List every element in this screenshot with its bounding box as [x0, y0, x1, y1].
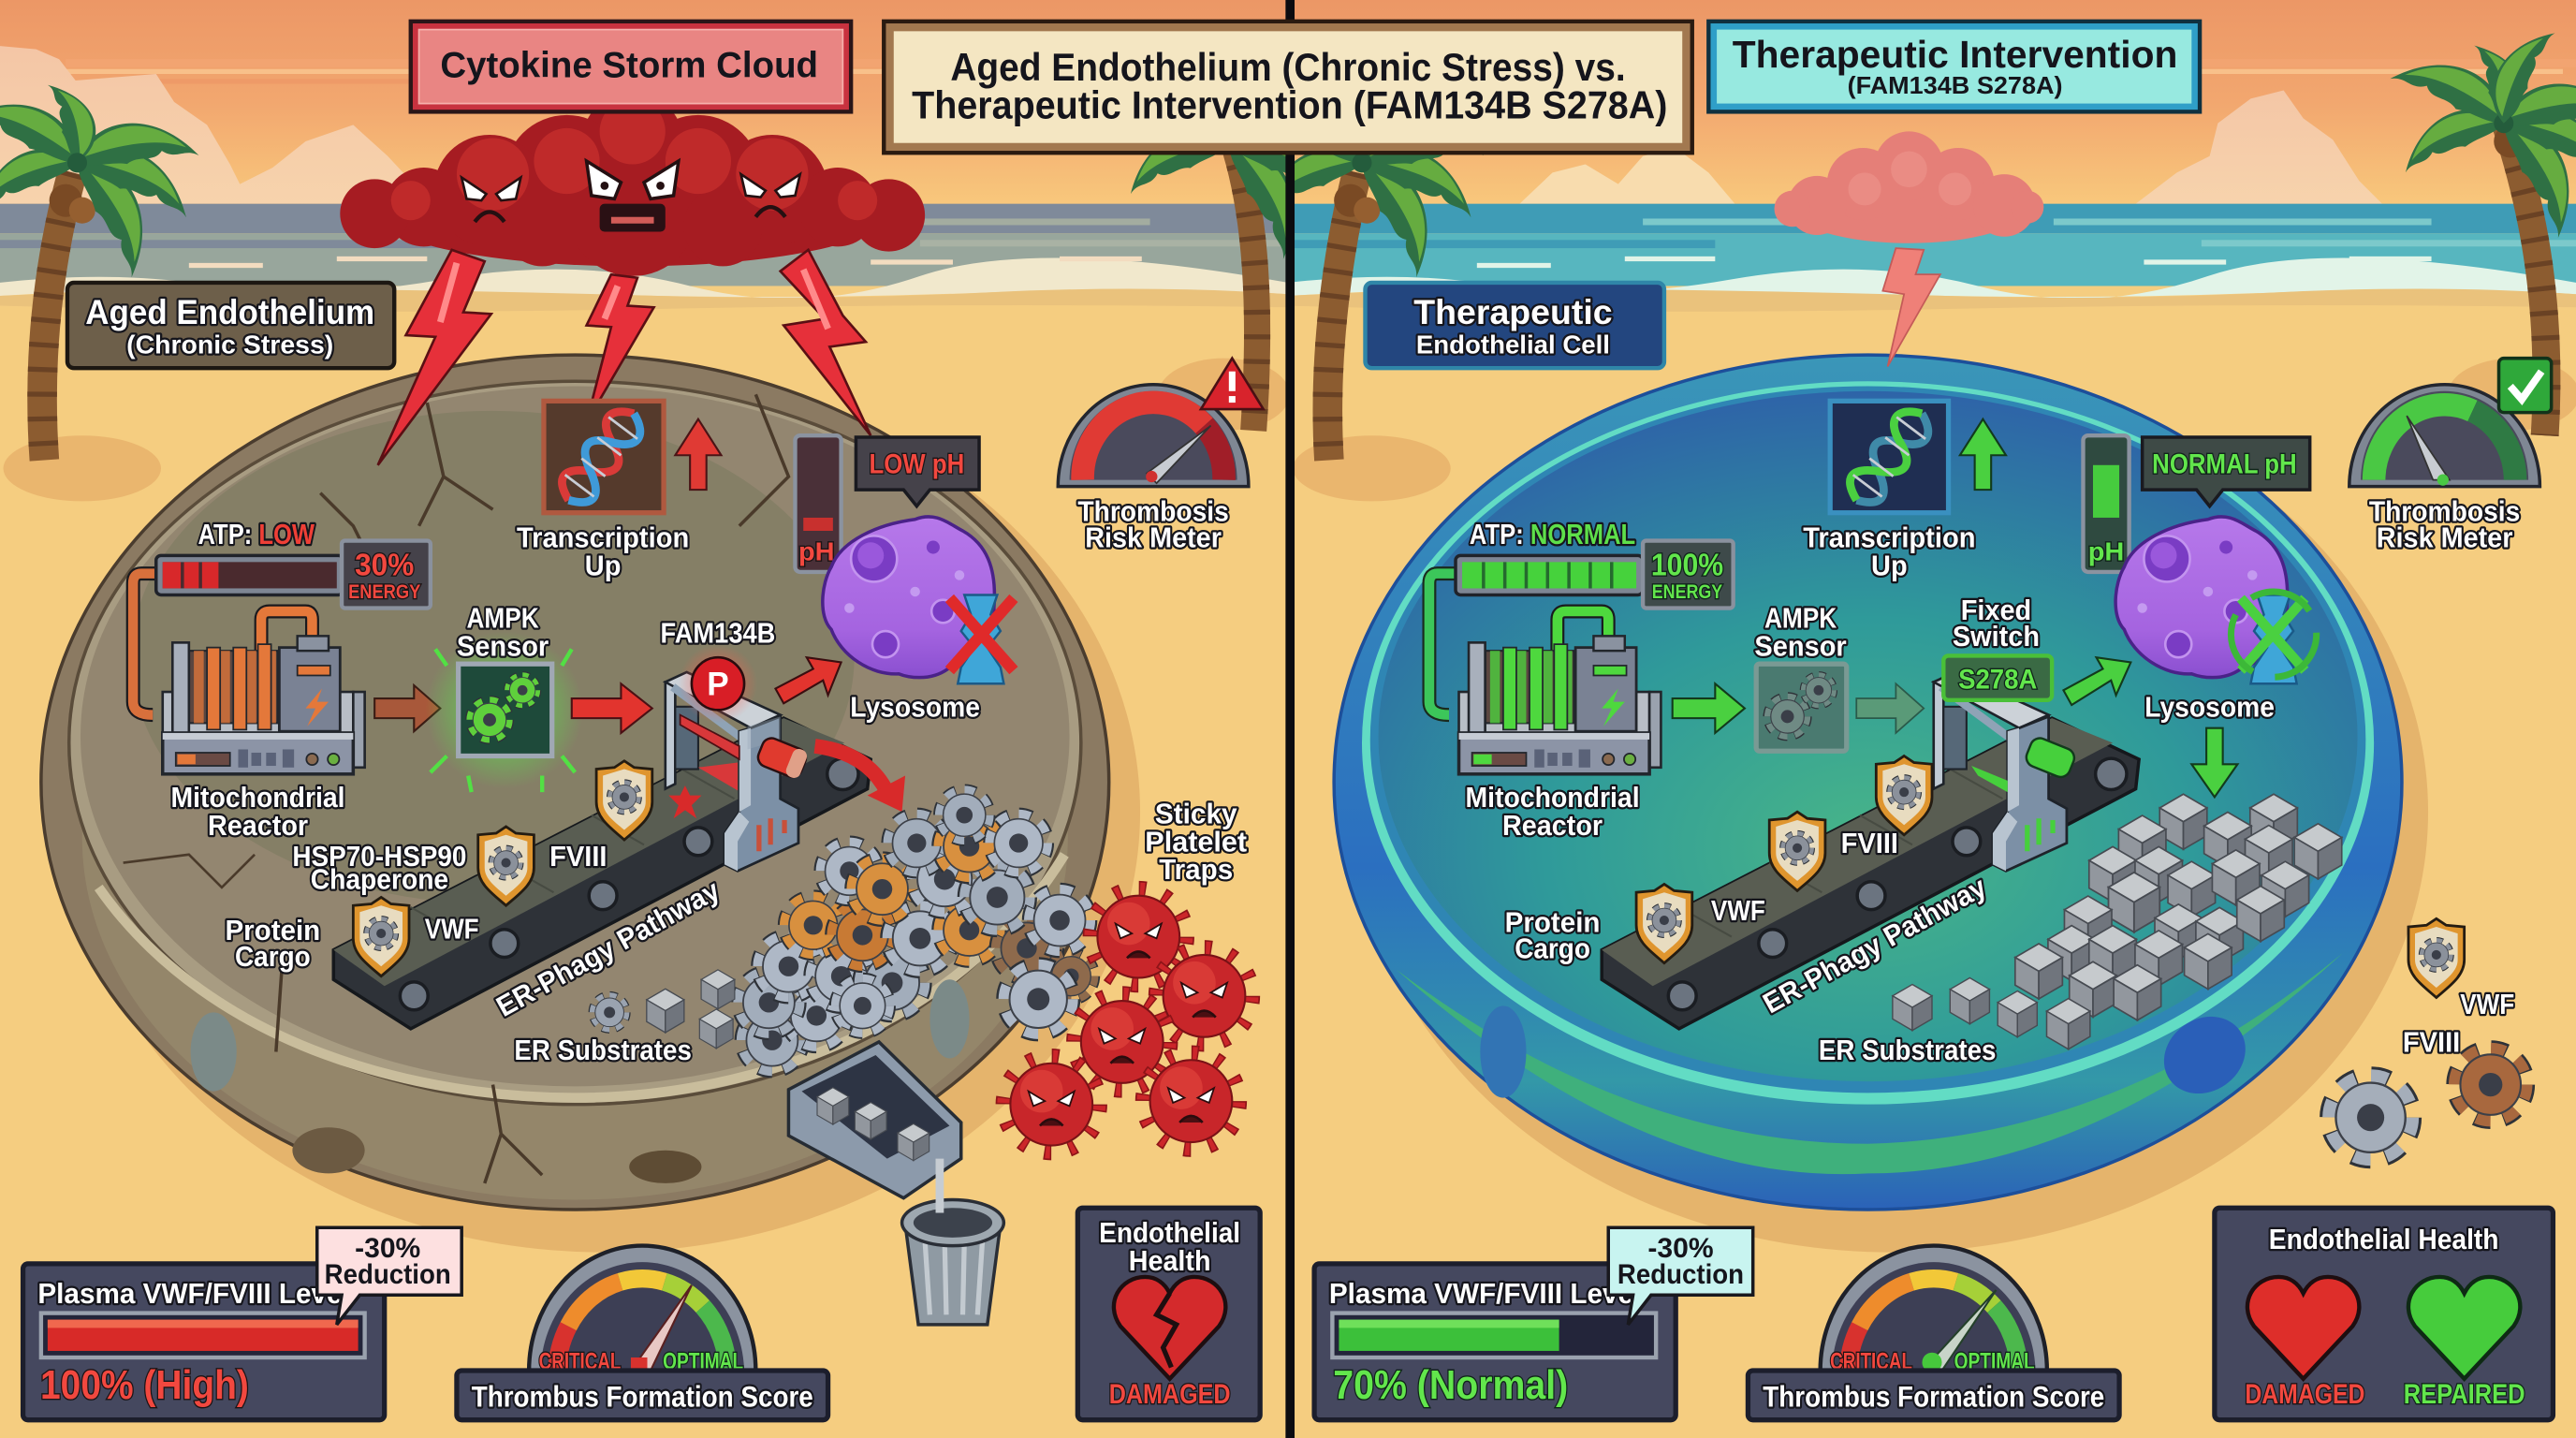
arrow: lysosome down: [2191, 728, 2237, 797]
gate right: [1934, 672, 2077, 871]
title: cytokine storm cloud: Cytokine Storm Cloud: [440, 46, 818, 86]
text: transcription up right: Transcription: [1803, 521, 1976, 554]
title: cytokine storm cloud: [411, 22, 851, 111]
panel: endothelial health right: Endothelial Health: [2269, 1223, 2499, 1255]
main title: Aged Endothelium (Chronic Stress) vs.: [950, 46, 1626, 89]
panel: plasma level left: 100% (High): [40, 1362, 249, 1408]
energy meter right: ENERGY: [1652, 581, 1722, 603]
therapeutic cell dish: [1334, 355, 2428, 1253]
label: aged endothelium: (Chronic Stress): [126, 330, 333, 359]
gauge: thrombus score left: Thrombus Formation Score: [472, 1380, 813, 1414]
panel: endothelial health right: REPAIRED: [2404, 1379, 2525, 1410]
panel: plasma level left: [23, 1264, 385, 1420]
text: thrombosis risk left: [1077, 494, 1229, 554]
text: transcription up left: Up: [585, 549, 621, 581]
panel: aged endothelium background: [0, 0, 1286, 502]
label: therapeutic endothelial cell: [1365, 283, 1664, 368]
energy meter left: ENERGY: [348, 581, 420, 603]
text: sticky platelet traps: Sticky: [1155, 797, 1237, 829]
label: fixed switch: S278A: [1958, 665, 2037, 696]
label: therapeutic endothelial cell: Endothelial Cell: [1416, 330, 1610, 359]
energy meter right: [1429, 518, 1734, 715]
panel: therapeutic background: [1295, 0, 2576, 502]
ER substrates left: [593, 970, 735, 1049]
text: ER substrates left: ER Substrates: [514, 1034, 692, 1066]
labels: cargo left: VWF: [425, 912, 479, 945]
sticky platelet traps: [1005, 890, 1251, 1151]
gauge: thrombus score left: CRITICAL: [539, 1349, 621, 1374]
badge: phosphorylation: [679, 644, 757, 723]
text: ER substrates right: ER Substrates: [1819, 1034, 1996, 1066]
text: mitochondrial reactor right: Mitochondrial: [1466, 781, 1640, 814]
labels: cargo left: [225, 840, 607, 973]
labels: cargo right: Protein: [1505, 905, 1600, 938]
storm cloud: [340, 92, 925, 276]
arrow: to lysosome left: [775, 657, 842, 703]
icon: grey gear: [2330, 1077, 2411, 1158]
AMPK sensor left: [426, 631, 583, 792]
text: AMPK sensor left: Sensor: [457, 629, 549, 662]
divider: [1285, 0, 1295, 1438]
callout: reduction right: [1608, 1227, 1753, 1325]
label: FAM134B: FAM134B: [661, 616, 775, 649]
labels: cargo right: Cargo: [1515, 932, 1590, 964]
label: ER-phagy pathway left: ER-Phagy Pathway: [490, 873, 725, 1023]
panel: endothelial health left: Endothelial: [1099, 1216, 1240, 1249]
energy meter left: ATP: LOW: [198, 518, 315, 550]
labels: cargo left: Cargo: [235, 940, 311, 973]
icon: released VWF shield: [2408, 918, 2465, 998]
arrow: blocked curved: [815, 746, 887, 792]
icon: DNA left: [544, 401, 664, 513]
cargo shields right: [1636, 756, 1932, 963]
label: therapeutic endothelial cell: Therapeutic: [1413, 293, 1613, 331]
gauge: thrombosis risk left: [1058, 385, 1249, 487]
icon: lysosome left: [823, 517, 1014, 683]
energy meter right: ATP: NORMAL: [1470, 518, 1635, 550]
label: fixed switch: [1943, 594, 2052, 700]
label: ER-phagy pathway right: ER-Phagy Pathway: [1757, 870, 1992, 1020]
labels: cargo right: FVIII: [1841, 827, 1898, 859]
text: lysosome right: Lysosome: [2144, 690, 2275, 723]
text: AMPK sensor right: Sensor: [1754, 629, 1847, 662]
arrowhead: blocked curved: [868, 776, 905, 812]
text: transcription up right: [1803, 521, 1976, 581]
mitochondrial reactor right: [1459, 611, 1661, 774]
panel: plasma level left: Plasma VWF/FVIII Level: [37, 1277, 350, 1310]
callout: reduction left: [317, 1227, 461, 1325]
text: mitochondrial reactor left: [171, 781, 345, 842]
arrow: AMPK to FAM134B: [572, 683, 652, 733]
gear pile: [739, 790, 1094, 1070]
labels: cargo right: VWF: [1711, 894, 1765, 927]
icon: warning: [1201, 359, 1264, 409]
text: AMPK sensor right: AMPK: [1764, 602, 1837, 635]
title: therapeutic intervention: Therapeutic Intervention: [1733, 33, 2177, 76]
text: transcription up left: [517, 521, 689, 581]
arrow: faded AMPK right: [1856, 683, 1924, 733]
icon: check: [2499, 359, 2552, 413]
text: AMPK sensor left: [457, 602, 549, 662]
text: mitochondrial reactor left: Mitochondrial: [171, 781, 345, 814]
palm tree right side of left panel: [1131, 154, 1286, 432]
labels: cargo left: FVIII: [549, 840, 607, 873]
label: fixed switch: Switch: [1953, 620, 2040, 653]
panel: plasma level right: 70% (Normal): [1333, 1362, 1568, 1408]
label: FVIII released: FVIII: [2403, 1025, 2460, 1058]
text: AMPK sensor left: AMPK: [466, 602, 539, 635]
pH meter left: [795, 435, 842, 572]
arrow: reactor to AMPK right: [1673, 683, 1745, 733]
panel: plasma level right: Plasma VWF/FVIII Level: [1329, 1277, 1641, 1310]
icon: rusty gear: [2455, 1049, 2526, 1121]
cargo shields left: [353, 761, 701, 976]
gauge: thrombus score left: [457, 1246, 828, 1420]
text: thrombosis risk left: Risk Meter: [1085, 521, 1222, 554]
text: thrombosis risk left: Thrombosis: [1077, 494, 1229, 527]
gauge: thrombus score left: OPTIMAL: [663, 1349, 743, 1374]
ER substrates right: [1893, 977, 2037, 1037]
labels: cargo left: Protein: [225, 914, 320, 946]
text: sticky platelet traps: Platelet: [1145, 825, 1247, 858]
energy meter left: 30%: [355, 548, 414, 582]
label: aged endothelium: Aged Endothelium: [85, 293, 374, 331]
badge: phosphorylation: P: [707, 667, 729, 703]
text: mitochondrial reactor left: Reactor: [208, 809, 308, 842]
waste chute: [788, 1042, 961, 1198]
text: AMPK sensor right: [1754, 602, 1847, 662]
aged cell dish: [41, 355, 1140, 1253]
pH meter right: pH: [2088, 537, 2124, 566]
arrow: to lysosome right: [2063, 657, 2130, 705]
panel: endothelial health right: [2215, 1208, 2553, 1420]
panel: plasma level right: [1314, 1264, 1676, 1420]
title: therapeutic intervention: [1708, 22, 2200, 111]
palm tree left of right panel: [1295, 154, 1484, 461]
callout: reduction right: Reduction: [1617, 1259, 1744, 1290]
arrow: transcription up left: [675, 419, 721, 490]
text: sticky platelet traps: [1145, 797, 1247, 886]
title: therapeutic intervention: (FAM134B S278A): [1848, 71, 2063, 99]
arrow: transcription up right: [1960, 419, 2006, 490]
conveyor left: [333, 718, 871, 1029]
conveyor right: [1602, 718, 2139, 1029]
callout: reduction left: Reduction: [325, 1259, 451, 1290]
icon: lysosome right: [2115, 517, 2317, 683]
gauge: thrombosis risk right: [2349, 385, 2539, 487]
gauge: thrombus score right: OPTIMAL: [1954, 1349, 2035, 1374]
main title: Therapeutic Intervention (FAM134B S278A): [912, 83, 1667, 126]
labels: cargo right: [1505, 827, 1898, 964]
panel: endothelial health left: Health: [1129, 1244, 1211, 1277]
panel: endothelial health left: [1077, 1208, 1260, 1420]
text: transcription up right: Up: [1871, 549, 1908, 581]
lightning bolts: [378, 250, 871, 465]
panel: endothelial health left: DAMAGED: [1109, 1379, 1231, 1410]
palm tree left: [0, 76, 202, 461]
callout: reduction right: -30%: [1647, 1233, 1714, 1264]
text: transcription up left: Transcription: [517, 521, 689, 554]
text: sticky platelet traps: Traps: [1159, 853, 1233, 886]
text: thrombosis risk right: [2369, 494, 2520, 554]
energy meter left: [133, 518, 431, 715]
labels: cargo left: Chaperone: [311, 863, 448, 896]
palm tree far right: [2390, 18, 2576, 435]
label: VWF released: VWF: [2460, 988, 2514, 1020]
gate left: [666, 672, 809, 871]
main title: [884, 22, 1692, 153]
pH meter right: [2083, 435, 2130, 572]
cube pile: [2015, 794, 2342, 1049]
mitochondrial reactor left: [163, 611, 365, 774]
gauge: thrombus score right: [1748, 1246, 2119, 1420]
weakened cloud: [1775, 131, 2043, 366]
text: mitochondrial reactor right: [1466, 781, 1640, 842]
text: lysosome left: Lysosome: [850, 690, 980, 723]
gauge: thrombus score right: Thrombus Formation Score: [1763, 1380, 2104, 1414]
text: thrombosis risk right: Risk Meter: [2377, 521, 2512, 554]
panel: endothelial health right: DAMAGED: [2245, 1379, 2364, 1410]
callout: reduction left: -30%: [355, 1233, 420, 1264]
AMPK sensor right: [1756, 664, 1847, 751]
arrow: reactor to AMPK left: [374, 685, 440, 731]
tag: low pH: LOW pH: [869, 449, 964, 480]
gauge: thrombus score right: CRITICAL: [1830, 1349, 1912, 1374]
text: thrombosis risk right: Thrombosis: [2369, 494, 2520, 527]
tag: low pH: [856, 437, 979, 506]
text: mitochondrial reactor right: Reactor: [1502, 809, 1603, 842]
tag: normal pH: NORMAL pH: [2152, 449, 2297, 480]
labels: cargo left: HSP70-HSP90: [292, 840, 466, 873]
icon: DNA right: [1830, 401, 1949, 513]
label: aged endothelium: [67, 283, 394, 368]
tag: normal pH: [2143, 437, 2310, 506]
pH meter left: pH: [798, 537, 835, 566]
label: fixed switch: Fixed: [1961, 594, 2031, 626]
trash can: [902, 1159, 1003, 1325]
energy meter right: 100%: [1651, 548, 1723, 582]
